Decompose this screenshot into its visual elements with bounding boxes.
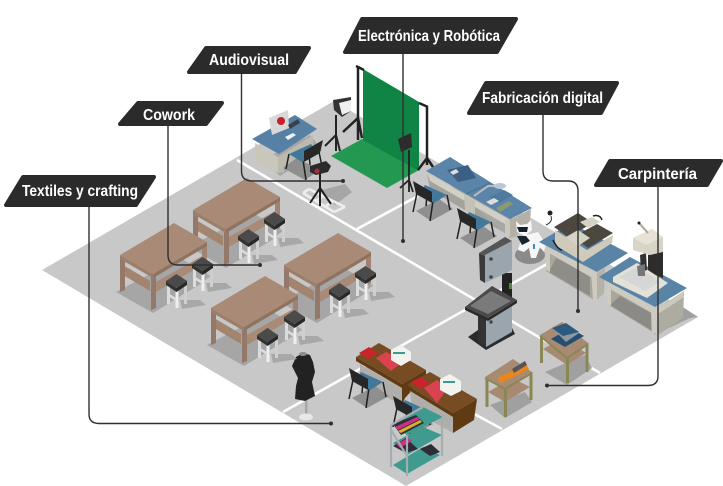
table with orange tool bbox=[485, 359, 532, 418]
leader line: electronica bbox=[401, 54, 405, 243]
workbench bbox=[426, 157, 532, 238]
stool bbox=[329, 283, 369, 318]
table 3 bbox=[280, 233, 376, 323]
label: Fabricacion digital: Fabricación digital bbox=[482, 90, 603, 107]
label: Fabricacion digital bbox=[469, 83, 617, 113]
stool bbox=[238, 229, 278, 264]
table 4 bbox=[207, 276, 303, 366]
zone: carpinteria bbox=[539, 213, 698, 335]
milling machine bbox=[613, 222, 668, 298]
label: Carpinteria bbox=[596, 161, 721, 185]
chair bbox=[283, 140, 323, 180]
label: Electronica y Robotica bbox=[345, 19, 516, 52]
stool bbox=[166, 274, 206, 309]
zone: audiovisual bbox=[252, 110, 323, 180]
laser cutter bbox=[553, 213, 613, 262]
table B bbox=[599, 257, 698, 335]
label: Audiovisual: Audiovisual bbox=[209, 52, 289, 69]
label: Textiles y crafting: Textiles y crafting bbox=[22, 183, 138, 200]
softbox light bbox=[325, 97, 351, 151]
chair 1 bbox=[413, 181, 453, 221]
leader line: fabricacion digital bbox=[543, 115, 580, 313]
chair 1 bbox=[349, 368, 389, 408]
chair 2 bbox=[457, 208, 497, 248]
label: Textiles y crafting bbox=[6, 177, 154, 205]
desk bbox=[252, 110, 322, 176]
table A bbox=[539, 223, 628, 300]
shelf with fabric rolls bbox=[391, 407, 443, 476]
leader line: audiovisual bbox=[242, 74, 345, 183]
table 2 bbox=[189, 178, 285, 268]
cowork bbox=[116, 178, 395, 366]
green screen bbox=[331, 66, 433, 188]
zone: electronica y robotica bbox=[413, 157, 532, 248]
label: Cowork bbox=[120, 103, 222, 124]
table 1 bbox=[116, 223, 212, 313]
band saw bbox=[465, 237, 517, 350]
leader line: cowork bbox=[168, 126, 262, 267]
stool bbox=[264, 212, 304, 247]
robot dog bbox=[515, 210, 552, 264]
leader line: carpinteria bbox=[545, 187, 658, 388]
sewing tables bbox=[349, 343, 477, 436]
stool bbox=[284, 310, 324, 345]
stool bbox=[192, 257, 232, 292]
table 1 bbox=[356, 343, 426, 405]
table 2 bbox=[407, 372, 477, 433]
label: Audiovisual bbox=[189, 48, 309, 72]
mannequin bbox=[292, 352, 315, 420]
front camera monitor bbox=[398, 133, 413, 192]
chair 2 bbox=[393, 396, 433, 436]
camera on dolly bbox=[303, 161, 352, 212]
label: Cowork: Cowork bbox=[143, 107, 195, 124]
storage table with toolbox bbox=[540, 322, 592, 385]
stool bbox=[257, 328, 297, 363]
stool bbox=[355, 266, 395, 301]
label: Electronica y Robotica: Electrónica y Robótica bbox=[358, 28, 500, 45]
floor bbox=[42, 101, 698, 486]
leader line: textiles bbox=[89, 207, 333, 426]
label: Carpinteria: Carpintería bbox=[618, 166, 697, 183]
